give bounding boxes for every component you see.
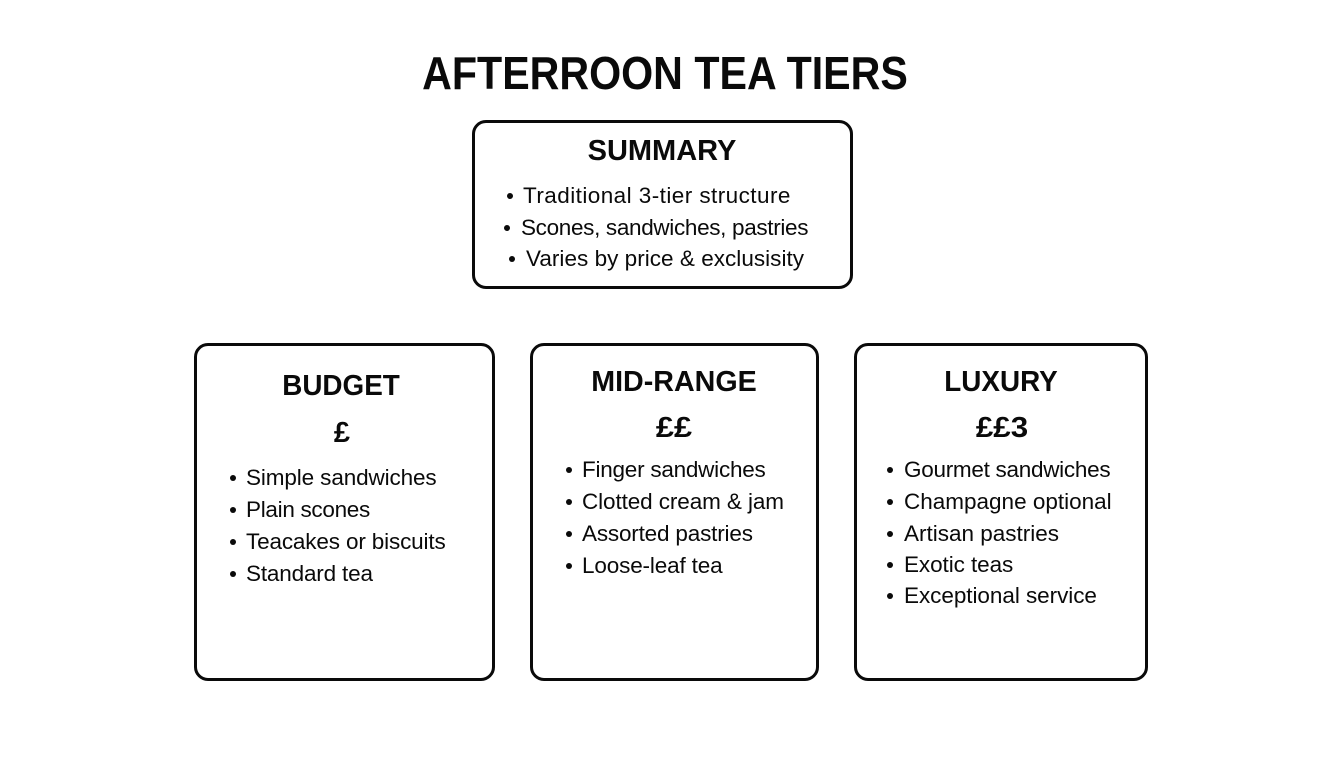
mid-range list: Loose-leaf tea	[582, 553, 723, 578]
luxury list: Gourmet sandwiches	[904, 457, 1110, 482]
mid-range list: Assorted pastries	[582, 521, 753, 546]
panel: mid-range	[530, 343, 819, 681]
budget list	[230, 465, 446, 586]
panel: luxury	[854, 343, 1148, 681]
luxury list: Artisan pastries	[904, 521, 1059, 546]
summary list: Traditional 3-tier structure	[523, 183, 791, 208]
budget list: Plain scones	[246, 497, 370, 522]
budget list: Standard tea	[246, 561, 373, 586]
budget list: Teacakes or biscuits	[246, 529, 446, 554]
summary list: Varies by price & exclusisity	[526, 246, 804, 271]
panel: summary	[472, 120, 853, 289]
heading: summary: SUMMARY	[588, 135, 736, 167]
luxury list: Champagne optional	[904, 489, 1112, 514]
price: budget: £	[334, 417, 350, 449]
mid-range list: Clotted cream & jam	[582, 489, 784, 514]
budget list: Simple sandwiches	[246, 465, 437, 490]
price: luxury: ££3	[976, 412, 1028, 444]
heading: luxury: LUXURY	[944, 366, 1057, 398]
summary list: Scones, sandwiches, pastries	[521, 215, 808, 240]
mid-range list: Finger sandwiches	[582, 457, 766, 482]
title: AFTERROON TEA TIERS	[422, 47, 907, 99]
summary list	[504, 183, 808, 271]
mid-range list	[566, 457, 784, 578]
luxury list: Exotic teas	[904, 552, 1013, 577]
heading: budget: BUDGET	[282, 370, 399, 402]
price: mid-range: ££	[656, 412, 692, 444]
luxury list	[887, 457, 1112, 608]
panel: budget	[194, 343, 495, 681]
luxury list: Exceptional service	[904, 583, 1097, 608]
heading: mid-range: MID-RANGE	[591, 366, 756, 398]
